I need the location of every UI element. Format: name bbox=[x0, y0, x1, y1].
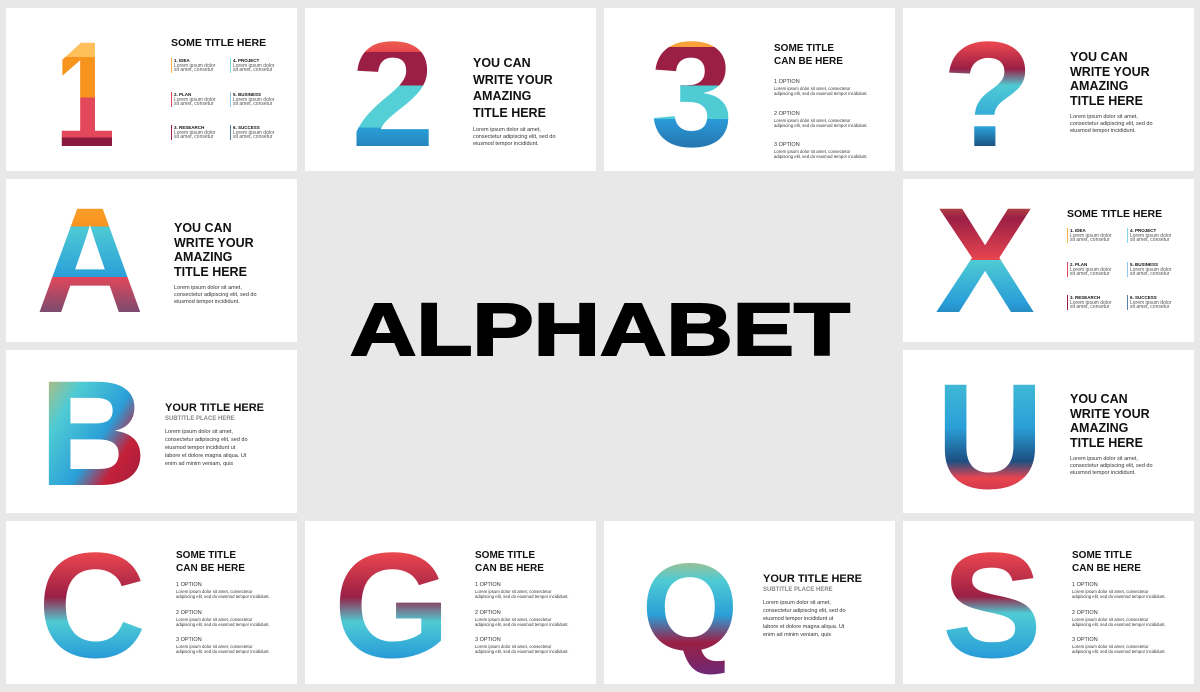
options: Lorem ipsum dolor sit amet, consectetur bbox=[176, 617, 253, 622]
body: enim ad minim veniam, quis bbox=[165, 461, 233, 467]
list items: 2. PLAN bbox=[1070, 262, 1087, 267]
letter Q: Q bbox=[642, 539, 738, 677]
options: 1 OPTION bbox=[475, 582, 501, 588]
options: 2 OPTION bbox=[475, 610, 501, 616]
options: adipiscing elit, sed do eiusmod tempor incididunt. bbox=[1072, 594, 1166, 599]
options: adipiscing elit, sed do eiusmod tempor incididunt. bbox=[1072, 649, 1166, 654]
body: eiusmod tempor incididunt. bbox=[174, 299, 240, 305]
title: WRITE YOUR bbox=[174, 236, 254, 250]
body: consectetur adipiscing elit, sed do bbox=[473, 134, 556, 140]
list items: sit amet, consetur bbox=[233, 101, 273, 107]
title: YOU CAN bbox=[174, 221, 232, 235]
list items: Lorem ipsum dolor bbox=[1070, 267, 1112, 273]
options: 3 OPTION bbox=[1072, 637, 1098, 643]
letter G: G bbox=[334, 521, 450, 689]
title: TITLE HERE bbox=[1070, 436, 1143, 450]
list items: Lorem ipsum dolor bbox=[233, 63, 275, 69]
list items bbox=[171, 58, 275, 140]
options: Lorem ipsum dolor sit amet, consectetur bbox=[1072, 589, 1149, 594]
list items: sit amet, consetur bbox=[1070, 237, 1110, 243]
options: adipiscing elit, sed do eiusmod tempor incididunt. bbox=[176, 594, 270, 599]
title: TITLE HERE bbox=[174, 265, 247, 279]
body: enim ad minim veniam, quis bbox=[763, 632, 831, 638]
options: adipiscing elit, sed do eiusmod tempor incididunt. bbox=[475, 649, 569, 654]
title: YOU CAN bbox=[473, 56, 531, 70]
title: AMAZING bbox=[1070, 79, 1128, 93]
title: SOME TITLE bbox=[176, 550, 236, 561]
body: Lorem ipsum dolor sit amet, bbox=[165, 429, 233, 435]
list items: 1. IDEA bbox=[174, 58, 191, 63]
list items: 6. SUCCESS bbox=[233, 125, 260, 130]
options: Lorem ipsum dolor sit amet, consectetur bbox=[176, 644, 253, 649]
list items: Lorem ipsum dolor bbox=[1130, 300, 1172, 306]
card: number 1 bbox=[6, 8, 297, 178]
list items: sit amet, consetur bbox=[174, 101, 214, 107]
card: letter X bbox=[903, 176, 1194, 344]
card: letter S bbox=[903, 521, 1194, 689]
options: Lorem ipsum dolor sit amet, consectetur bbox=[475, 589, 552, 594]
options: 3 OPTION bbox=[475, 637, 501, 643]
list items bbox=[1067, 228, 1172, 310]
body: Lorem ipsum dolor sit amet, bbox=[174, 285, 242, 291]
list items: Lorem ipsum dolor bbox=[1070, 233, 1112, 239]
title: YOUR TITLE HERE bbox=[165, 402, 264, 414]
subtitle: SUBTITLE PLACE HERE bbox=[763, 587, 833, 593]
letter 1: 1 bbox=[55, 10, 115, 178]
title: CAN BE HERE bbox=[475, 563, 544, 574]
title: CAN BE HERE bbox=[176, 563, 245, 574]
body: Lorem ipsum dolor sit amet, bbox=[763, 600, 831, 606]
title: SOME TITLE HERE bbox=[1067, 208, 1162, 220]
letter U: U bbox=[936, 352, 1044, 520]
list items: Lorem ipsum dolor bbox=[174, 63, 216, 69]
list items: sit amet, consetur bbox=[1130, 304, 1170, 310]
options: Lorem ipsum dolor sit amet, consectetur bbox=[475, 644, 552, 649]
list items: Lorem ipsum dolor bbox=[1130, 233, 1172, 239]
list items: sit amet, consetur bbox=[174, 134, 214, 140]
letter S: S bbox=[942, 521, 1042, 689]
title: SOME TITLE bbox=[475, 550, 535, 561]
options: Lorem ipsum dolor sit amet, consectetur bbox=[1072, 617, 1149, 622]
card: letter C bbox=[6, 521, 297, 689]
options: Lorem ipsum dolor sit amet, consectetur bbox=[1072, 644, 1149, 649]
list items: Lorem ipsum dolor bbox=[233, 97, 275, 103]
options: 1 OPTION bbox=[1072, 582, 1098, 588]
title: AMAZING bbox=[174, 250, 232, 264]
list items: Lorem ipsum dolor bbox=[1070, 300, 1112, 306]
body: consectetur adipiscing elit, sed do bbox=[1070, 463, 1153, 469]
list items: sit amet, consetur bbox=[1130, 237, 1170, 243]
title: YOUR TITLE HERE bbox=[763, 573, 862, 585]
card: question mark bbox=[903, 8, 1194, 178]
options: 3 OPTION bbox=[176, 637, 202, 643]
options: 1 OPTION bbox=[176, 582, 202, 588]
list items: sit amet, consetur bbox=[1070, 304, 1110, 310]
main title: ALPHABET bbox=[350, 288, 850, 371]
options: adipiscing elit, sed do eiusmod tempor incididunt. bbox=[774, 123, 868, 128]
options: Lorem ipsum dolor sit amet, consectetur bbox=[774, 86, 851, 91]
options: Lorem ipsum dolor sit amet, consectetur bbox=[774, 118, 851, 123]
list items: 4. PROJECT bbox=[233, 58, 260, 63]
options: adipiscing elit, sed do eiusmod tempor incididunt. bbox=[1072, 622, 1166, 627]
list items: 6. SUCCESS bbox=[1130, 295, 1157, 300]
body: eiusmod tempor incididunt. bbox=[1070, 470, 1136, 476]
list items: sit amet, consetur bbox=[174, 67, 214, 73]
title: AMAZING bbox=[1070, 421, 1128, 435]
title: WRITE YOUR bbox=[1070, 65, 1150, 79]
body: labore et dolore magna aliqua. Ut bbox=[165, 453, 247, 459]
options: 2 OPTION bbox=[176, 610, 202, 616]
body: Lorem ipsum dolor sit amet, bbox=[473, 127, 541, 133]
title: CAN BE HERE bbox=[1072, 563, 1141, 574]
card: letter U bbox=[903, 350, 1194, 520]
options: adipiscing elit, sed do eiusmod tempor incididunt. bbox=[176, 649, 270, 654]
card: letter G bbox=[305, 521, 596, 689]
list items: 3. RESEARCH bbox=[1070, 295, 1100, 300]
options: Lorem ipsum dolor sit amet, consectetur bbox=[475, 617, 552, 622]
options: 2 OPTION bbox=[1072, 610, 1098, 616]
title: WRITE YOUR bbox=[473, 73, 553, 87]
body: labore et dolore magna aliqua. Ut bbox=[763, 624, 845, 630]
options: Lorem ipsum dolor sit amet, consectetur bbox=[176, 589, 253, 594]
subtitle: SUBTITLE PLACE HERE bbox=[165, 416, 235, 422]
card: number 2 bbox=[305, 8, 596, 178]
list items: sit amet, consetur bbox=[233, 67, 273, 73]
list items: sit amet, consetur bbox=[1130, 271, 1170, 277]
list items: 4. PROJECT bbox=[1130, 228, 1157, 233]
body: Lorem ipsum dolor sit amet, bbox=[1070, 114, 1138, 120]
list items: sit amet, consetur bbox=[233, 134, 273, 140]
list items: 5. BUSINESS bbox=[233, 92, 261, 97]
list items: 3. RESEARCH bbox=[174, 125, 204, 130]
title: SOME TITLE bbox=[1072, 550, 1132, 561]
title: CAN BE HERE bbox=[774, 56, 843, 67]
body: eiusmod tempor incididunt ut bbox=[763, 616, 834, 622]
options: adipiscing elit, sed do eiusmod tempor incididunt. bbox=[774, 91, 868, 96]
letter ?: ? bbox=[942, 10, 1034, 178]
letter A: A bbox=[36, 176, 144, 344]
options: adipiscing elit, sed do eiusmod tempor incididunt. bbox=[774, 154, 868, 159]
title: WRITE YOUR bbox=[1070, 407, 1150, 421]
options: 1 OPTION bbox=[774, 79, 800, 85]
options: Lorem ipsum dolor sit amet, consectetur bbox=[774, 149, 851, 154]
card: letter Q bbox=[604, 521, 895, 684]
list items: Lorem ipsum dolor bbox=[174, 130, 216, 136]
options: adipiscing elit, sed do eiusmod tempor incididunt. bbox=[475, 622, 569, 627]
title: TITLE HERE bbox=[473, 106, 546, 120]
body: consectetur adipiscing elit, sed do bbox=[763, 608, 846, 614]
list items: 1. IDEA bbox=[1070, 228, 1087, 233]
letter 2: 2 bbox=[351, 10, 435, 178]
body: consectetur adipiscing elit, sed do bbox=[174, 292, 257, 298]
title: SOME TITLE bbox=[774, 43, 834, 54]
body: consectetur adipiscing elit, sed do bbox=[1070, 121, 1153, 127]
title: YOU CAN bbox=[1070, 392, 1128, 406]
options: adipiscing elit, sed do eiusmod tempor incididunt. bbox=[176, 622, 270, 627]
body: eiusmod tempor incididunt. bbox=[473, 141, 539, 147]
letter C: C bbox=[38, 521, 146, 689]
options: adipiscing elit, sed do eiusmod tempor incididunt. bbox=[475, 594, 569, 599]
options: 2 OPTION bbox=[774, 111, 800, 117]
body: eiusmod tempor incididunt. bbox=[1070, 128, 1136, 134]
card: number 3 bbox=[604, 8, 895, 178]
card: letter A bbox=[6, 176, 297, 344]
letter X: X bbox=[935, 176, 1035, 344]
letter B: B bbox=[39, 349, 147, 517]
title: YOU CAN bbox=[1070, 50, 1128, 64]
list items: Lorem ipsum dolor bbox=[174, 97, 216, 103]
list items: 2. PLAN bbox=[174, 92, 191, 97]
letter 3: 3 bbox=[650, 10, 734, 178]
title: AMAZING bbox=[473, 89, 531, 103]
options: 3 OPTION bbox=[774, 142, 800, 148]
title: TITLE HERE bbox=[1070, 94, 1143, 108]
body: eiusmod tempor incididunt ut bbox=[165, 445, 236, 451]
title: SOME TITLE HERE bbox=[171, 37, 266, 49]
list items: 5. BUSINESS bbox=[1130, 262, 1158, 267]
list items: Lorem ipsum dolor bbox=[1130, 267, 1172, 273]
list items: sit amet, consetur bbox=[1070, 271, 1110, 277]
card: letter B bbox=[6, 349, 297, 517]
body: Lorem ipsum dolor sit amet, bbox=[1070, 456, 1138, 462]
list items: Lorem ipsum dolor bbox=[233, 130, 275, 136]
body: consectetur adipiscing elit, sed do bbox=[165, 437, 248, 443]
